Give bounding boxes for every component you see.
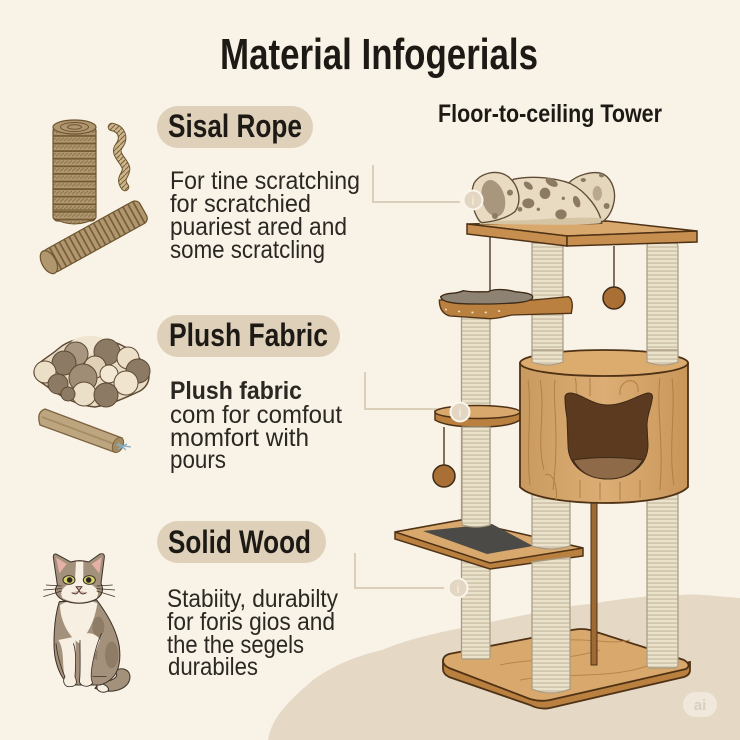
- right post: [647, 243, 678, 668]
- left post: [462, 316, 490, 659]
- connector lines: [355, 165, 460, 588]
- cat tower: [395, 172, 697, 709]
- plush pill: [157, 315, 340, 357]
- base platform: [443, 629, 690, 709]
- badge middle: [450, 402, 470, 422]
- front post lower: [532, 557, 570, 693]
- hammock platform: [395, 520, 583, 569]
- ai watermark: [683, 692, 717, 717]
- panel: sisal rope: [37, 106, 360, 276]
- icon: rope coil: [53, 120, 96, 224]
- post stub right: [647, 350, 678, 365]
- wood text: Stabiity, durabilty: [167, 585, 338, 613]
- top platform: [467, 221, 697, 246]
- plush text: com for comfout: [170, 401, 342, 429]
- sisal pill: [157, 106, 313, 148]
- ai watermark: ai: [694, 697, 706, 714]
- wood text: the the segels: [167, 631, 304, 659]
- icon: cat: [43, 554, 130, 692]
- tower heading: Floor-to-ceiling Tower: [438, 100, 662, 128]
- post stub left: [532, 350, 563, 365]
- floor blob: [268, 594, 740, 740]
- badge bottom: [448, 578, 468, 598]
- badge bottom: i: [457, 581, 460, 596]
- tunnel bed: [472, 172, 615, 225]
- wood text: for foris gios and: [167, 608, 335, 636]
- icon: plush bed: [34, 336, 150, 407]
- icon: wood log: [39, 409, 131, 454]
- icon: diagonal rope: [37, 199, 149, 276]
- pole: [591, 500, 597, 665]
- hanging strings: [444, 237, 614, 466]
- badge top: [464, 190, 482, 210]
- front post: [532, 492, 570, 549]
- badge middle: i: [459, 405, 462, 420]
- wood pill: [157, 521, 326, 563]
- cylinder house: [520, 350, 688, 503]
- sisal text: [170, 167, 360, 264]
- wood text: durabiles: [168, 653, 258, 681]
- fur shelf: [439, 290, 572, 319]
- plush text: momfort with: [170, 424, 309, 452]
- plush text: [170, 377, 342, 474]
- sisal text: for scratchied: [170, 190, 311, 218]
- plush text: pours: [170, 446, 226, 474]
- badge top: i: [472, 193, 475, 208]
- small round shelf: [435, 406, 520, 427]
- icon: rope strand: [112, 127, 126, 187]
- cat shaped opening: [565, 393, 652, 479]
- sisal text: puariest ared and: [170, 213, 347, 241]
- panel: plush fabric: [34, 315, 342, 474]
- post behind upper: [532, 243, 563, 364]
- panel: solid wood: [43, 521, 338, 692]
- toy ball upper: [603, 287, 625, 309]
- icon: strand fill: [112, 127, 126, 187]
- left post mid section: [462, 427, 490, 527]
- wood heading: Solid Wood: [168, 524, 311, 560]
- wood text: [167, 585, 338, 681]
- plush heading: Plush Fabric: [169, 317, 328, 353]
- toy ball lower: [433, 465, 455, 487]
- sisal text: For tine scratching: [170, 167, 360, 195]
- sisal heading: Sisal Rope: [168, 108, 302, 144]
- plush text: Plush fabric: [170, 377, 302, 405]
- title: Material Infogerials: [220, 30, 538, 79]
- sisal text: some scratcling: [170, 236, 325, 264]
